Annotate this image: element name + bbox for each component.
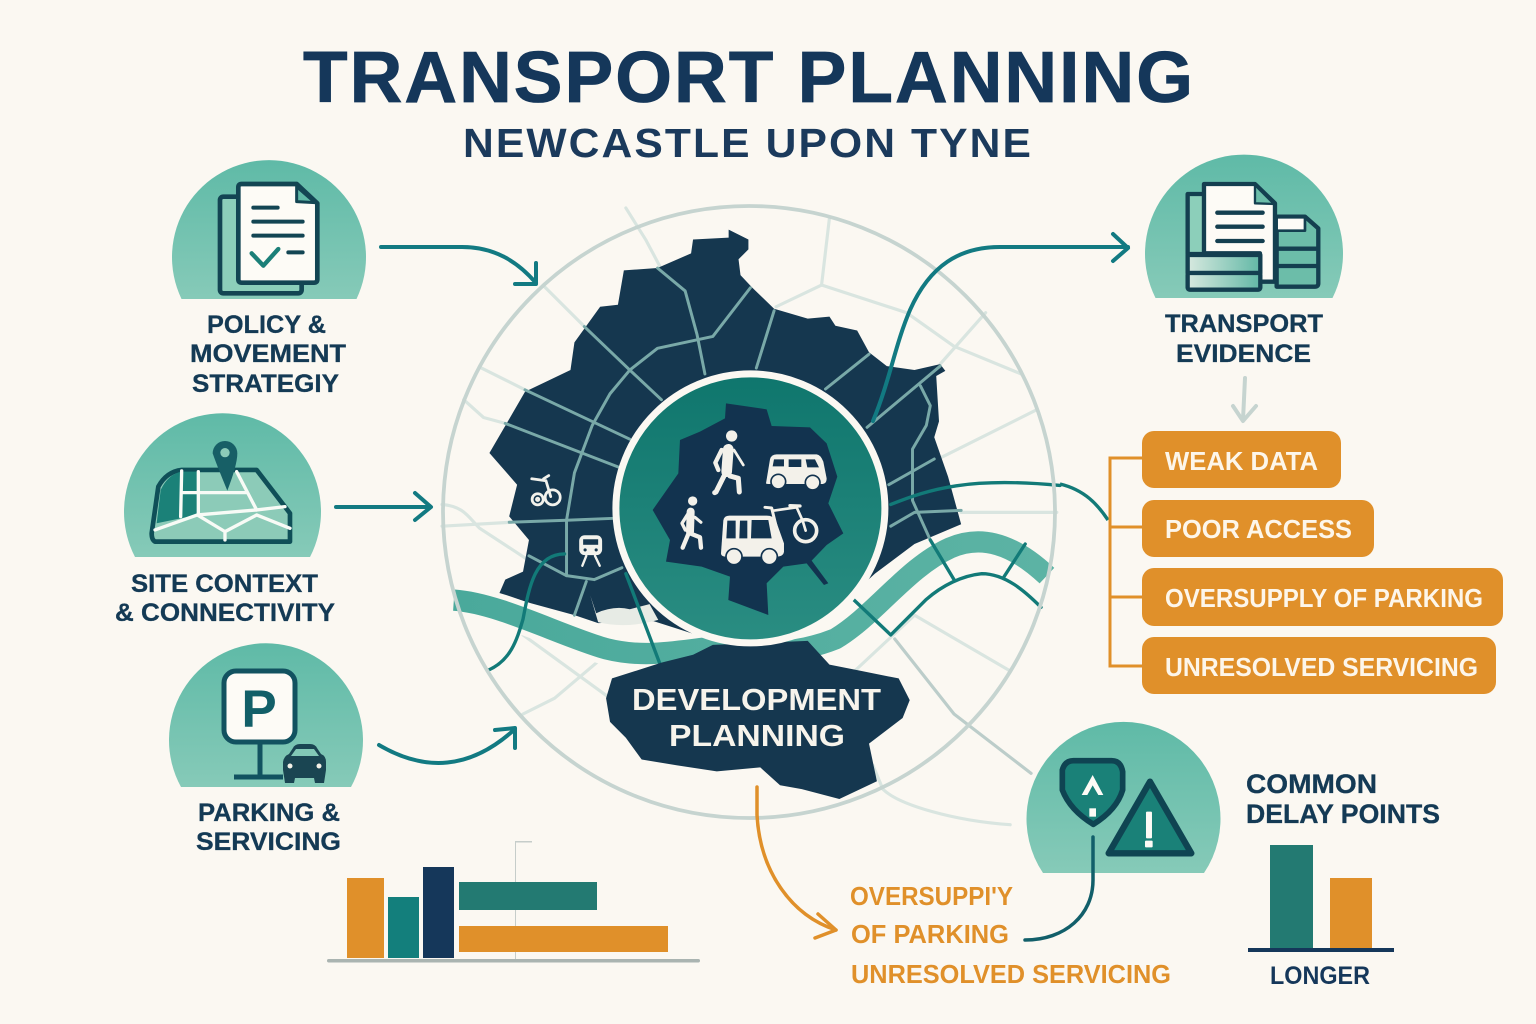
- issue: oversupply of parking: [1142, 568, 1503, 626]
- icon: bike on map: [532, 476, 560, 505]
- issue: weak data: [1142, 431, 1341, 488]
- icon: pedestrian large: [715, 430, 743, 493]
- arrow: site context to map: [336, 493, 431, 520]
- arrow: parking to map: [379, 728, 515, 763]
- central map: [442, 206, 1060, 825]
- connector to bottleneck text: [1025, 837, 1093, 940]
- arrow: teal map line to transport evidence: [873, 234, 1128, 421]
- issue: poor access: POOR ACCESS: [1165, 514, 1352, 544]
- title: TRANSPORT PLANNING: [303, 38, 1195, 118]
- arrow: evidence to issues: [1233, 378, 1256, 421]
- connector: map to issues: [1060, 484, 1108, 520]
- panel: common delay points: [1246, 769, 1440, 990]
- issue: weak data: WEAK DATA: [1165, 446, 1318, 476]
- orange bottleneck text: UNRESOLVED SERVICING: [851, 959, 1171, 989]
- axis label: LONGER: [1270, 962, 1370, 990]
- arrow: development planning to bottlenecks: [757, 787, 836, 938]
- icon: parking sign and car: P: [241, 680, 277, 739]
- panel: transport evidence: EVIDENCE: [1176, 340, 1311, 368]
- river casing: [454, 542, 1047, 654]
- issues bracket: [1110, 458, 1142, 666]
- orange bottleneck text: OF PARKING: [851, 919, 1009, 949]
- orange bottleneck text: OVERSUPPI'Y: [850, 881, 1013, 911]
- label: SITE CONTEXT: [131, 570, 318, 598]
- city roads: [505, 268, 961, 615]
- badge: [169, 643, 363, 787]
- issue: oversupply of parking: OVERSUPPLY OF PARKING: [1165, 583, 1483, 613]
- icon: documents with check: [220, 184, 317, 293]
- badge: [124, 413, 321, 557]
- badge: [1145, 155, 1343, 298]
- panel: policy and movement strategy: STRATEGIY: [192, 370, 339, 398]
- orange bottleneck text: [850, 881, 1171, 989]
- issue: unresolved servicing: [1142, 637, 1496, 694]
- development planning blob: PLANNING: [669, 718, 845, 753]
- icon: map with pin: [152, 441, 290, 542]
- development planning label: DEVELOPMENT: [632, 682, 881, 717]
- bar chart: bottom left: [327, 841, 700, 962]
- panel: warning icons: [1025, 722, 1220, 940]
- inner modes map: [653, 403, 843, 615]
- icon: parking sign and car: [224, 671, 326, 783]
- panel: policy and movement strategy: MOVEMENT: [190, 340, 346, 368]
- city silhouette: [489, 230, 961, 635]
- label: POLICY &: [207, 311, 326, 339]
- panel: transport evidence: [1145, 155, 1343, 368]
- issue: poor access: [1142, 500, 1374, 557]
- arrow: policy to map: [381, 247, 536, 284]
- issue: unresolved servicing: UNRESOLVED SERVICING: [1165, 652, 1478, 682]
- outer roads: [442, 208, 1057, 825]
- development planning blob: [606, 641, 910, 799]
- icon: pedestrian small: [682, 496, 701, 548]
- panel: site context and connectivity: [115, 413, 335, 627]
- boundary circle: [443, 206, 1055, 818]
- icon: document stacks: [1188, 184, 1318, 290]
- panel: parking and servicing: SERVICING: [196, 828, 341, 856]
- quayside landmark: [590, 595, 658, 625]
- map artwork: [442, 208, 1060, 825]
- badge: [172, 160, 366, 299]
- icon: train on map: [579, 535, 602, 566]
- panel: site context and connectivity: & CONNECTIVITY: [115, 599, 335, 627]
- icon: bus: [721, 516, 784, 565]
- panel: parking and servicing: [169, 643, 363, 856]
- icon: bicycle: [765, 506, 817, 542]
- River Tyne: [454, 542, 1047, 654]
- teal connector lines: [487, 483, 1060, 671]
- subtitle: NEWCASTLE UPON TYNE: [463, 120, 1033, 166]
- heading: COMMON: [1246, 769, 1377, 799]
- panel: common delay points: DELAY POINTS: [1246, 799, 1440, 829]
- panel: policy and movement strategy: [172, 160, 366, 398]
- icon: shield and warning triangle: [1062, 761, 1191, 853]
- label: TRANSPORT: [1165, 310, 1323, 338]
- core circle: [616, 374, 885, 643]
- bar chart: [1248, 845, 1394, 952]
- label: PARKING &: [198, 799, 340, 827]
- badge: [1026, 722, 1220, 873]
- icon: van: [766, 454, 827, 490]
